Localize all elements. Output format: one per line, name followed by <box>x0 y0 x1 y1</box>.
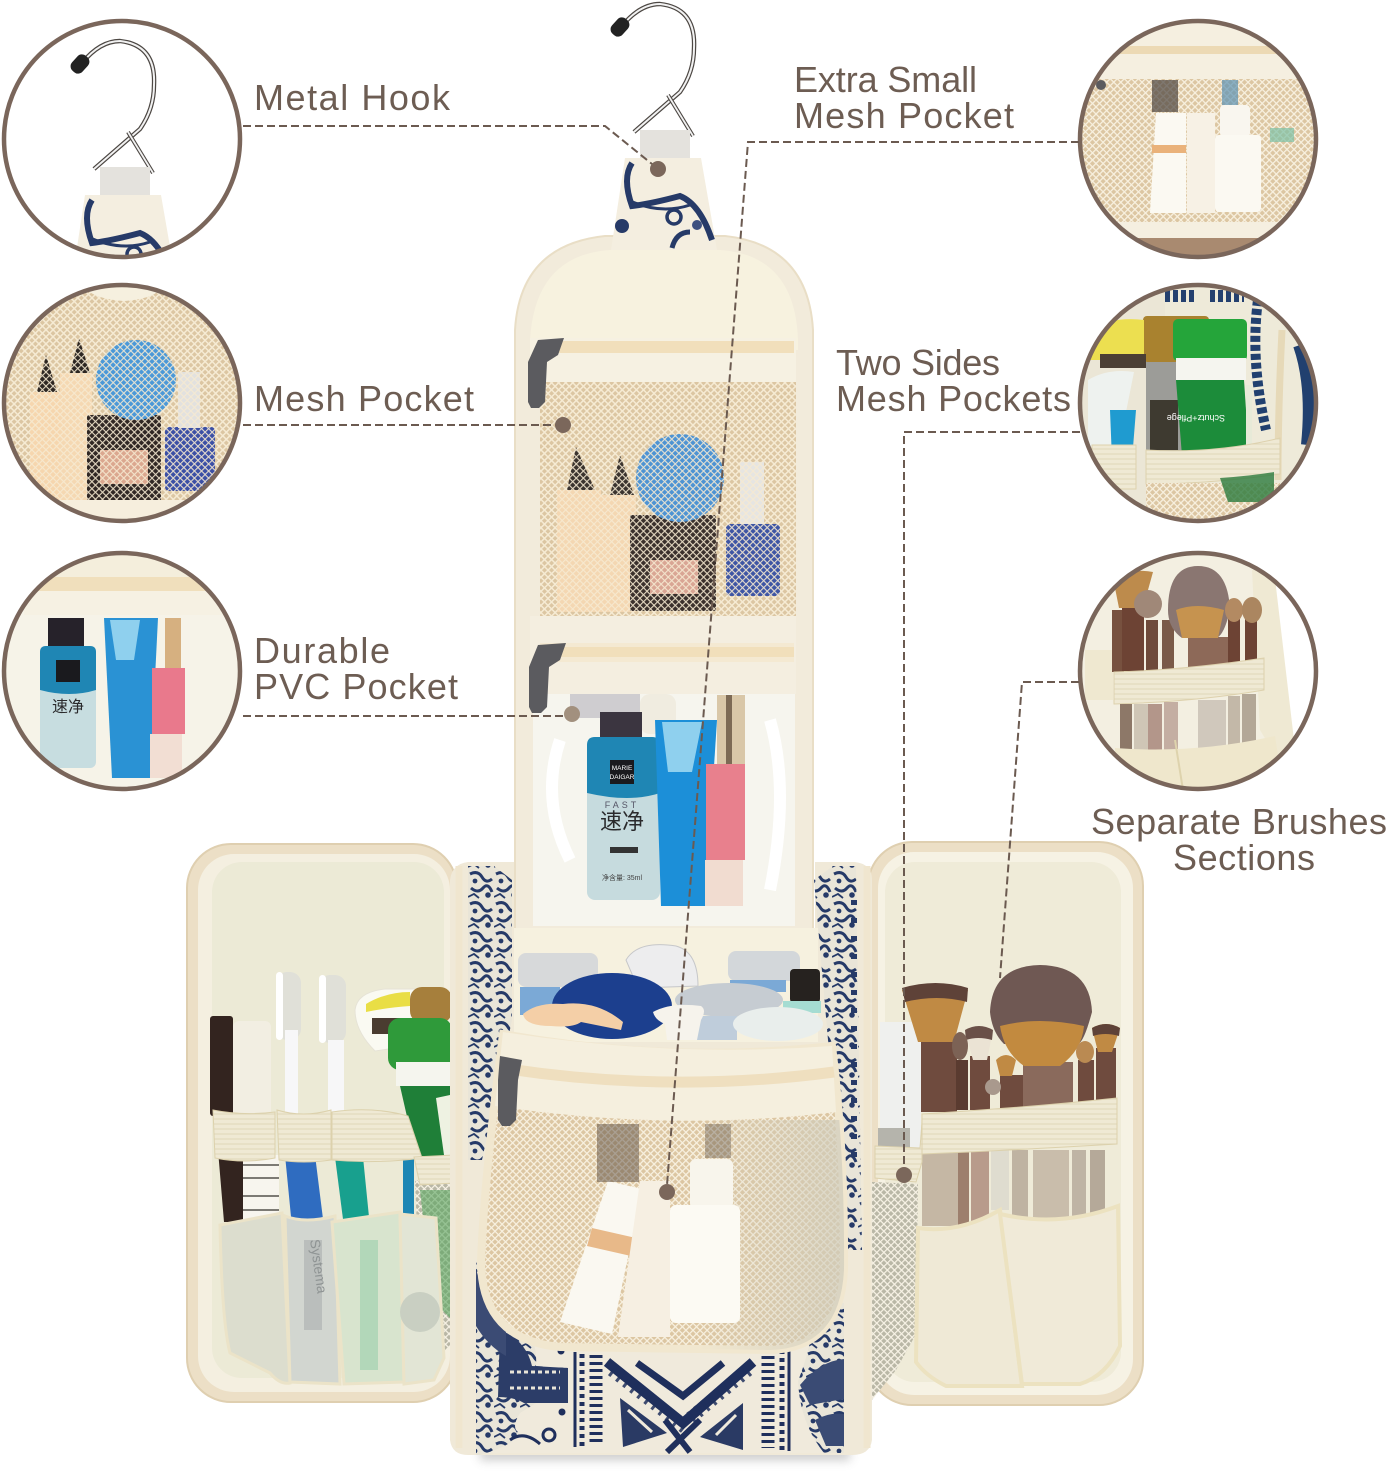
callout circle: extra small mesh pocket <box>1080 21 1316 262</box>
bottle with printed label: DAIGAR <box>610 774 635 781</box>
side mesh pocket <box>872 1182 918 1400</box>
dashed leader: mesh pocket <box>243 417 571 433</box>
bottle with printed label: 速净 <box>600 809 644 834</box>
label: Extra Small Mesh Pocket: Extra Small <box>794 59 977 100</box>
dashed leader: extra small mesh pocket <box>659 142 1079 1200</box>
bottom center geometric print <box>476 1345 844 1453</box>
blue item behind <box>403 1155 414 1221</box>
lower zipper band <box>530 616 796 694</box>
label: Durable PVC Pocket: Durable <box>254 630 390 671</box>
label: Two Sides Mesh Pockets <box>836 342 1071 419</box>
brush pockets <box>916 1206 1120 1386</box>
callout circle: two sides mesh pockets: Schutz+Pflege <box>1167 413 1225 423</box>
brush ferrules <box>921 1040 1116 1112</box>
label: Extra Small Mesh Pocket: Mesh Pocket <box>794 95 1014 136</box>
upper mesh pocket <box>540 382 796 616</box>
elephant print right <box>798 1303 844 1453</box>
left print strip <box>468 866 512 1160</box>
blue tube <box>655 720 717 906</box>
elastic band <box>875 1098 1117 1182</box>
label: Separate Brushes Sections: Sections <box>1173 837 1315 878</box>
zipper edge trims <box>459 866 867 1448</box>
tubes in pocket <box>560 1181 642 1334</box>
brand text on brush: Systema <box>307 1238 330 1295</box>
bottle with printed label <box>587 712 660 900</box>
hanging flap <box>515 236 813 935</box>
callout circle: two sides mesh pockets <box>1080 285 1320 525</box>
bag body with printed fabric <box>450 862 872 1455</box>
callout circle: PVC pocket <box>0 553 244 789</box>
dashed leader: PVC pocket <box>243 706 580 722</box>
label: Separate Brushes Sections <box>1091 801 1387 878</box>
label: Two Sides Mesh Pockets: Mesh Pockets <box>836 378 1071 419</box>
toothbrush teal <box>319 975 370 1227</box>
right bag wing panel: brushes <box>868 842 1143 1405</box>
bottle with printed label: FAST <box>605 800 639 810</box>
label: Two Sides Mesh Pockets: Two Sides <box>836 342 1000 383</box>
bottle with printed label: MARIE <box>612 765 633 772</box>
pocket zipper band <box>495 1032 836 1121</box>
metal hook <box>608 4 717 250</box>
gold cap <box>410 987 452 1023</box>
brush bristles <box>902 965 1120 1076</box>
label: Separate Brushes Sections: Separate Brushes <box>1091 801 1387 842</box>
jars <box>518 953 598 1015</box>
front mesh pocket <box>481 1032 850 1350</box>
right print strip <box>814 866 862 1250</box>
white tube <box>233 1021 279 1222</box>
green tube <box>388 1018 452 1156</box>
side mesh with green item <box>415 1180 455 1360</box>
pink tube <box>705 695 745 906</box>
callout circle: mesh pocket <box>0 285 244 525</box>
label: Extra Small Mesh Pocket <box>794 59 1014 136</box>
PVC pocket with items <box>533 694 795 926</box>
label: Metal Hook: Metal Hook <box>254 77 451 118</box>
lower pockets <box>220 1212 444 1384</box>
elastic band sections <box>213 1110 454 1185</box>
soft shadow under bag <box>480 1448 850 1460</box>
label: Durable PVC Pocket <box>254 630 458 707</box>
elephant print left <box>476 1262 568 1455</box>
brush handles <box>922 1150 1105 1226</box>
zipper pulls <box>498 338 566 1126</box>
eyeliner pencil <box>210 1016 244 1222</box>
callout circle: brushes sections <box>1080 553 1332 800</box>
label: Durable PVC Pocket: PVC Pocket <box>254 666 458 707</box>
dashed leader: brushes sections <box>985 682 1079 1095</box>
dashed leader: metal hook <box>243 126 666 177</box>
left bag wing panel: toothbrushes <box>187 844 457 1402</box>
inner cavity with jars <box>514 928 823 1042</box>
dashed leader: two sides mesh pockets <box>896 432 1080 1183</box>
upper zipper band <box>530 338 796 382</box>
razor <box>355 989 415 1051</box>
callout circle: PVC pocket: 速净 <box>52 698 84 716</box>
white bottles <box>878 1022 921 1156</box>
callout circle: metal hook <box>4 21 240 287</box>
bottle with printed label: 净含量: 35ml <box>602 873 642 882</box>
label: Mesh Pocket: Mesh Pocket <box>254 378 474 419</box>
toothbrush blue <box>276 972 324 1227</box>
